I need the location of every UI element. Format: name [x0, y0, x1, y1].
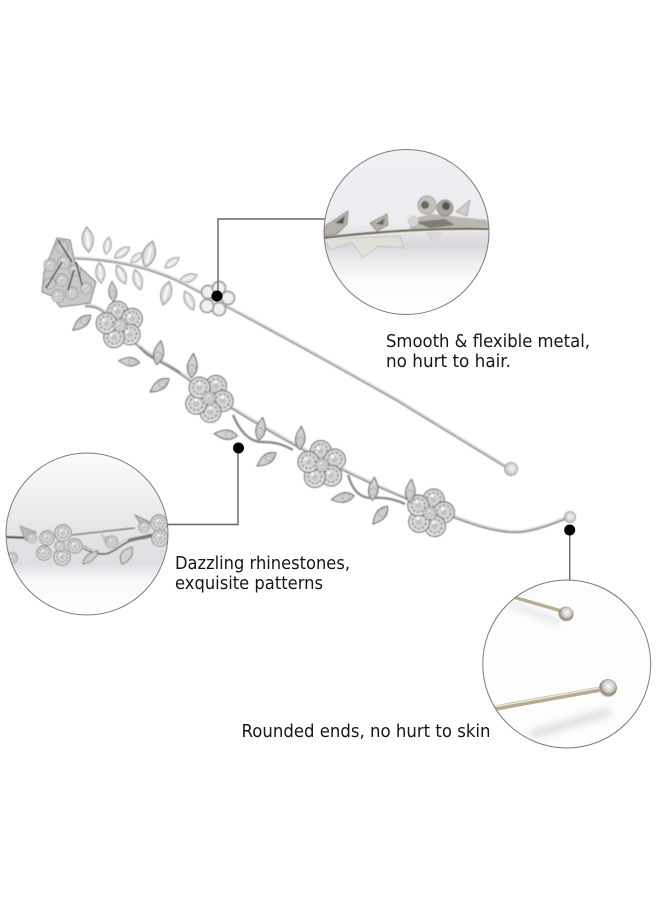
front band leaves — [70, 281, 416, 527]
left rhinestone cluster — [42, 238, 96, 307]
callout: rounded ends — [242, 524, 654, 752]
detail circle outline top — [324, 150, 489, 314]
caption: smooth metal: Smooth & flexible metal, — [386, 332, 590, 352]
detail circle outline right — [483, 580, 651, 748]
caption: rhinestones: exquisite patterns — [175, 574, 323, 594]
connector dot right — [564, 524, 575, 536]
callout: smooth metal — [212, 146, 590, 372]
connector line right — [569, 530, 571, 580]
detail circle outline left — [6, 453, 168, 615]
headband illustration — [42, 226, 576, 540]
connector dot left — [233, 442, 244, 454]
connector line left — [167, 448, 238, 524]
caption: smooth metal — [386, 332, 590, 372]
front band flowers — [93, 297, 459, 540]
caption: rounded ends: Rounded ends, no hurt to skin — [242, 722, 490, 742]
detail circle: rhinestones close-up — [6, 469, 168, 580]
caption: rhinestones — [175, 554, 350, 594]
front band vine — [85, 305, 576, 532]
callout: rhinestones — [4, 442, 350, 617]
detail circle: rounded pin ends — [494, 596, 617, 740]
back band flower — [200, 282, 234, 316]
detail circle: metal band close-up — [324, 150, 488, 277]
back band wire — [75, 257, 518, 476]
caption: rhinestones: Dazzling rhinestones, — [175, 554, 350, 574]
connector dot top — [212, 290, 222, 302]
infographic canvas — [6, 149, 652, 748]
back band leaves — [81, 226, 199, 312]
caption: smooth metal: no hurt to hair. — [386, 352, 511, 372]
connector line top — [218, 219, 325, 296]
